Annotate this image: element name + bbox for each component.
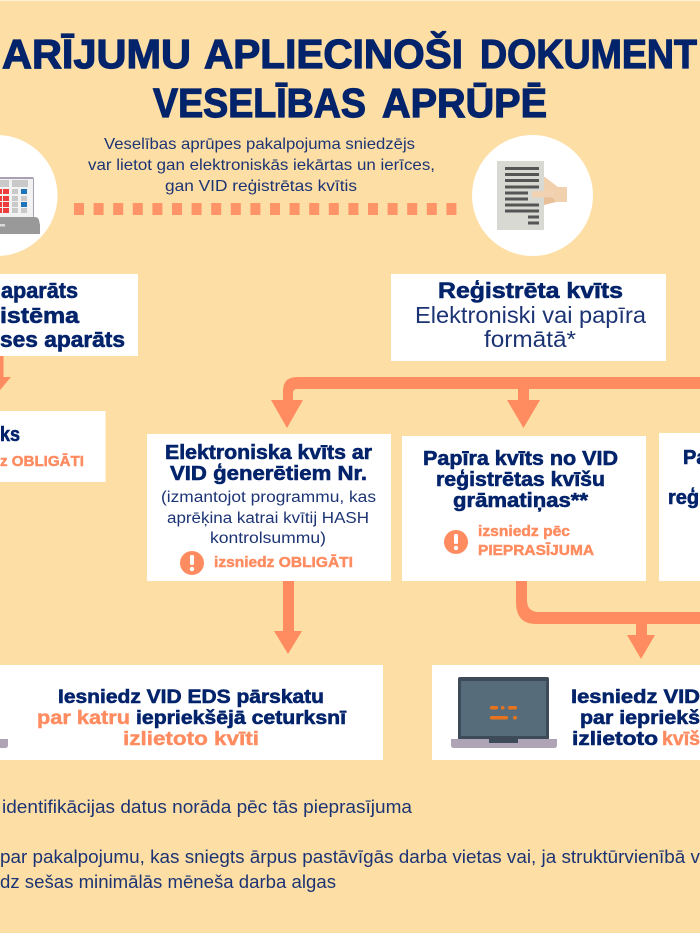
- panel: electronic receipt: VID ģenerētiem Nr.: [170, 463, 367, 485]
- panel: cash register types: istēma: [0, 303, 80, 328]
- panel: quarterly report per receipt: izlietoto kvīti: [123, 728, 259, 750]
- panel: paper receipt book: [402, 436, 646, 581]
- panel: cash register types: [0, 274, 138, 356]
- footnotes: dz sešas minimālās mēneša darba algas: [0, 871, 336, 892]
- panel: quarterly report for used receipt books: izlietoto: [572, 728, 658, 750]
- panel: electronic receipt: kontrolsummu): [210, 530, 326, 547]
- panel: registered receipt: Reģistrēta kvīts: [438, 278, 623, 303]
- panel: paper receipt book: Papīra kvīts no VID: [423, 448, 618, 470]
- panel: quarterly report per receipt: iepriekšējā ceturksnī: [136, 707, 347, 729]
- panel: registered receipt: Elektroniski vai papīra: [415, 302, 646, 328]
- panel: cash register types: ses aparāts: [0, 327, 125, 352]
- icon: paper receipt and hand: [472, 135, 593, 256]
- icon: cash register: [0, 135, 58, 256]
- panel: cheque: [0, 411, 106, 482]
- panel: paper receipt book: grāmatiņas**: [453, 490, 588, 512]
- icon: laptop: [451, 677, 557, 748]
- panel: registered receipt: [391, 274, 666, 361]
- panel: registered receipt: formātā*: [484, 326, 576, 352]
- title: APLIECINOŠI: [204, 31, 463, 77]
- panel: third receipt type: reģ: [668, 487, 699, 509]
- panel: cash register types: aparāts: [1, 278, 78, 303]
- panel: quarterly report for used receipt books: [432, 665, 700, 760]
- panel: cheque: ks: [0, 424, 20, 446]
- panel: quarterly report per receipt: Iesniedz VID EDS pārskatu: [58, 686, 324, 708]
- dotted divider: [74, 203, 456, 215]
- title: APRŪPĒ: [382, 80, 547, 126]
- footnotes: identifikācijas datus norāda pēc tās pieprasījuma: [2, 796, 413, 817]
- arrow: paper receipts to report: [516, 581, 700, 659]
- panel: electronic receipt: [147, 434, 391, 581]
- panel: electronic receipt: aprēķina katrai kvītij HASH: [167, 510, 369, 527]
- panel: quarterly report for used receipt books: Iesniedz VID: [571, 686, 700, 708]
- arrow: register to cheque: [0, 356, 11, 396]
- icon: laptop: [0, 677, 8, 748]
- panel: paper receipt book: izsniedz pēc: [478, 524, 570, 540]
- title: ARĪJUMU: [2, 31, 191, 77]
- panel: third receipt type: [659, 433, 700, 581]
- panel: quarterly report for used receipt books: kvīš: [662, 728, 700, 750]
- panel: cheque: z OBLIGĀTI: [0, 453, 84, 470]
- footnotes: par pakalpojumu, kas sniegts ārpus pastāvīgās darba vietas vai, ja struktūrvienībā v: [0, 846, 700, 867]
- panel: electronic receipt: (izmantojot programmu, kas: [161, 489, 376, 506]
- intro text: [88, 136, 435, 195]
- panel: paper receipt book: PIEPRASĪJUMA: [478, 542, 595, 559]
- intro text: Veselības aprūpes pakalpojuma sniedzējs: [104, 136, 415, 153]
- title: VESELĪBAS: [153, 80, 366, 126]
- icon: warning: [180, 551, 204, 575]
- panel: quarterly report per receipt: [0, 665, 383, 760]
- arrow: branching connector from registered receipt: [271, 377, 700, 428]
- arrow: electronic receipt to report: [274, 581, 302, 654]
- icon: warning: [444, 530, 468, 554]
- panel: electronic receipt: Elektroniska kvīts ar: [165, 442, 372, 464]
- panel: quarterly report for used receipt books: par iepriekš: [580, 707, 700, 729]
- footnotes: [0, 796, 700, 892]
- title: [0, 31, 700, 126]
- panel: paper receipt book: reģistrētas kvīšu: [436, 469, 605, 491]
- panel: quarterly report per receipt: par katru: [37, 707, 130, 729]
- intro text: var lietot gan elektroniskās iekārtas un ierīces,: [88, 157, 435, 174]
- panel: electronic receipt: izsniedz OBLIGĀTI: [214, 554, 353, 571]
- intro text: gan VID reģistrētas kvītis: [165, 177, 357, 195]
